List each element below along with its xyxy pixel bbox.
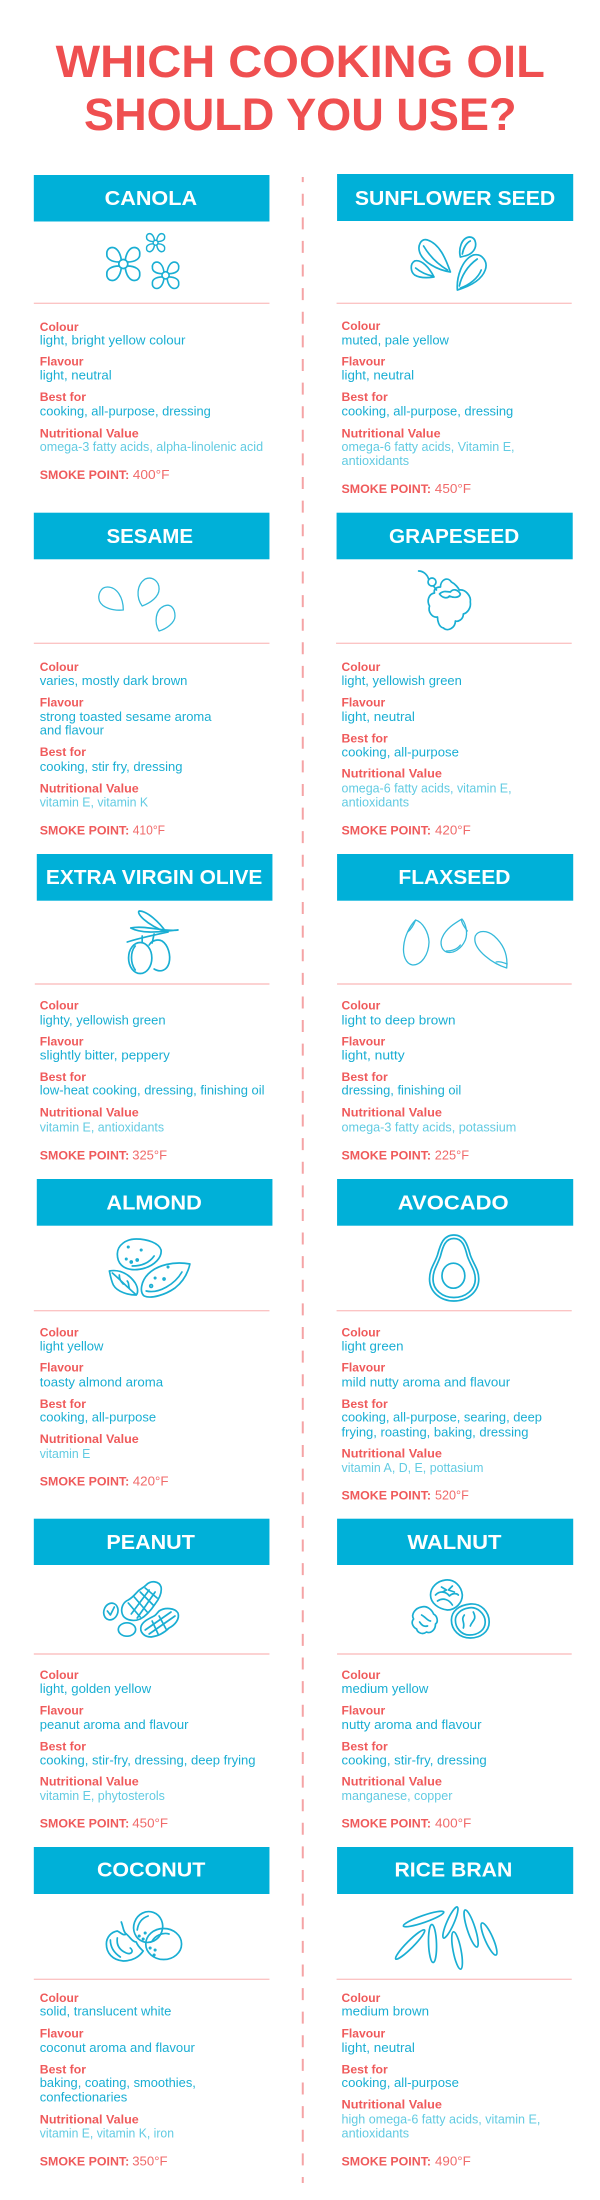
header: walnut bbox=[337, 1519, 573, 1565]
facts: avocado: Flavour bbox=[342, 1361, 386, 1375]
facts: almond: Best for bbox=[40, 1397, 86, 1411]
facts: almond: light yellow bbox=[40, 1339, 104, 1353]
facts: sesame: SMOKE POINT: bbox=[40, 823, 129, 837]
facts: rice bran: antioxidants bbox=[342, 2126, 409, 2140]
facts: sesame: Nutritional Value bbox=[40, 781, 139, 795]
header: coconut: COCONUT bbox=[97, 1859, 206, 1882]
facts: flaxseed: Flavour bbox=[342, 1035, 386, 1049]
facts: flaxseed: Nutritional Value bbox=[342, 1105, 442, 1119]
facts: extra virgin olive: slightly bitter, peppery bbox=[40, 1049, 171, 1063]
facts: avocado: mild nutty aroma and flavour bbox=[342, 1376, 510, 1390]
header: extra virgin olive bbox=[37, 854, 272, 901]
panel: canola bbox=[34, 175, 269, 482]
facts: coconut: Nutritional Value bbox=[40, 2112, 139, 2126]
facts: grapeseed: light, yellowish green bbox=[342, 674, 462, 688]
title bbox=[56, 36, 545, 140]
header: avocado: AVOCADO bbox=[398, 1191, 509, 1214]
header: sesame: SESAME bbox=[106, 525, 193, 548]
facts: sesame: strong toasted sesame aroma bbox=[40, 710, 212, 724]
facts: extra virgin olive: lighty, yellowish green bbox=[40, 1014, 166, 1028]
facts: walnut: Nutritional Value bbox=[342, 1775, 442, 1789]
icon: sesame seeds bbox=[99, 578, 175, 631]
facts: sesame: varies, mostly dark brown bbox=[40, 674, 187, 688]
icon: avocado bbox=[430, 1235, 479, 1301]
icon: canola flowers bbox=[107, 234, 179, 288]
facts: avocado: Best for bbox=[342, 1397, 388, 1411]
facts: walnut: SMOKE POINT: bbox=[342, 1817, 431, 1831]
facts: rice bran: light, neutral bbox=[342, 2041, 415, 2055]
panel: sesame bbox=[34, 513, 269, 837]
facts: sunflower seed: muted, pale yellow bbox=[342, 333, 450, 348]
facts: canola: 400°F bbox=[133, 468, 170, 482]
facts: rice bran: 490°F bbox=[435, 2154, 471, 2168]
facts: rice bran: Flavour bbox=[342, 2026, 386, 2040]
facts: coconut: confectionaries bbox=[40, 2091, 127, 2105]
facts: rice bran: Nutritional Value bbox=[342, 2098, 442, 2112]
facts: coconut: SMOKE POINT: bbox=[40, 2154, 129, 2168]
facts: coconut: coconut aroma and flavour bbox=[40, 2041, 195, 2055]
facts: peanut: SMOKE POINT: bbox=[40, 1817, 129, 1831]
header: coconut bbox=[34, 1847, 269, 1894]
facts: almond: 420°F bbox=[133, 1474, 169, 1488]
header: sesame bbox=[34, 513, 269, 559]
facts: almond: SMOKE POINT: bbox=[40, 1474, 129, 1488]
facts: extra virgin olive bbox=[40, 999, 264, 1162]
facts: canola: Colour bbox=[40, 320, 79, 334]
facts: flaxseed: SMOKE POINT: bbox=[342, 1148, 431, 1162]
facts: peanut: cooking, stir-fry, dressing, deep frying bbox=[40, 1753, 256, 1767]
facts: grapeseed: Nutritional Value bbox=[342, 767, 442, 781]
facts: extra virgin olive: Colour bbox=[40, 999, 79, 1013]
facts: avocado: Nutritional Value bbox=[342, 1447, 442, 1461]
facts: avocado: Colour bbox=[342, 1326, 381, 1340]
facts: canola: Best for bbox=[40, 390, 86, 404]
facts: walnut: medium yellow bbox=[342, 1682, 429, 1696]
icon: rice grains bbox=[393, 1906, 500, 1970]
facts: walnut bbox=[342, 1668, 487, 1831]
facts: sunflower seed: cooking, all-purpose, dressing bbox=[342, 405, 513, 419]
facts: grapeseed: omega-6 fatty acids, vitamin E, bbox=[342, 782, 512, 796]
facts: walnut: Best for bbox=[342, 1739, 388, 1753]
header: sunflower seed bbox=[337, 174, 573, 221]
header: peanut: PEANUT bbox=[106, 1531, 195, 1554]
facts: almond: toasty almond aroma bbox=[40, 1376, 163, 1390]
panel: sunflower seed bbox=[337, 174, 573, 496]
facts: extra virgin olive: Nutritional Value bbox=[40, 1105, 139, 1119]
facts: canola: Flavour bbox=[40, 355, 84, 369]
facts: canola: SMOKE POINT: bbox=[40, 468, 129, 482]
facts: flaxseed: 225°F bbox=[435, 1148, 470, 1162]
facts: canola: omega-3 fatty acids, alpha-linolenic acid bbox=[40, 440, 263, 454]
header: extra virgin olive: EXTRA VIRGIN OLIVE bbox=[46, 866, 262, 889]
facts: peanut: Colour bbox=[40, 1668, 79, 1682]
facts: sunflower seed: antioxidants bbox=[342, 454, 409, 468]
panel: extra virgin olive bbox=[35, 854, 272, 1162]
facts: walnut: cooking, stir-fry, dressing bbox=[342, 1753, 487, 1767]
facts: extra virgin olive: Flavour bbox=[40, 1035, 84, 1049]
facts: extra virgin olive: Best for bbox=[40, 1070, 86, 1084]
facts: walnut: 400°F bbox=[435, 1817, 472, 1831]
facts: sesame bbox=[40, 660, 212, 837]
header: almond bbox=[37, 1179, 272, 1226]
title: SHOULD YOU USE? bbox=[84, 89, 517, 140]
icon: walnuts bbox=[412, 1580, 489, 1638]
facts: avocado: light green bbox=[342, 1339, 404, 1353]
facts: sunflower seed: 450°F bbox=[435, 482, 472, 496]
title: WHICH COOKING OIL bbox=[56, 36, 545, 87]
facts: rice bran: medium brown bbox=[342, 2005, 429, 2019]
header: sunflower seed: SUNFLOWER SEED bbox=[355, 187, 555, 210]
facts: rice bran: cooking, all-purpose bbox=[342, 2076, 459, 2090]
facts: peanut: vitamin E, phytosterols bbox=[40, 1789, 165, 1803]
facts: flaxseed: dressing, finishing oil bbox=[342, 1084, 461, 1098]
facts: coconut: Flavour bbox=[40, 2026, 84, 2040]
facts: rice bran: Colour bbox=[342, 1991, 381, 2005]
facts: peanut: Best for bbox=[40, 1739, 86, 1753]
facts: walnut: nutty aroma and flavour bbox=[342, 1718, 482, 1732]
facts: peanut: Nutritional Value bbox=[40, 1775, 139, 1789]
facts: flaxseed bbox=[342, 999, 516, 1162]
facts: rice bran bbox=[342, 1991, 540, 2168]
panel: grapeseed bbox=[336, 513, 573, 837]
facts: grapeseed: cooking, all-purpose bbox=[342, 745, 459, 759]
facts: canola: cooking, all-purpose, dressing bbox=[40, 405, 211, 419]
header: almond: ALMOND bbox=[106, 1191, 202, 1214]
facts: peanut: peanut aroma and flavour bbox=[40, 1718, 189, 1732]
header: rice bran bbox=[337, 1847, 573, 1894]
header: flaxseed: FLAXSEED bbox=[398, 866, 510, 889]
facts: flaxseed: omega-3 fatty acids, potassium bbox=[342, 1120, 516, 1134]
facts: sunflower seed: SMOKE POINT: bbox=[342, 482, 431, 496]
facts: sunflower seed: Best for bbox=[342, 390, 388, 404]
facts: almond: cooking, all-purpose bbox=[40, 1411, 156, 1425]
facts: canola bbox=[40, 320, 263, 482]
facts: extra virgin olive: 325°F bbox=[132, 1148, 167, 1162]
facts: sesame: 410°F bbox=[133, 823, 165, 837]
facts: sunflower seed: Colour bbox=[342, 319, 381, 333]
facts: walnut: manganese, copper bbox=[342, 1789, 452, 1803]
facts: sunflower seed: Nutritional Value bbox=[342, 426, 441, 440]
header: grapeseed: GRAPESEED bbox=[389, 525, 519, 548]
header: canola: CANOLA bbox=[105, 187, 197, 210]
panel: walnut bbox=[337, 1519, 573, 1831]
facts: flaxseed: Best for bbox=[342, 1070, 388, 1084]
icon: almonds bbox=[109, 1239, 190, 1297]
facts: grapeseed bbox=[342, 660, 512, 837]
facts: extra virgin olive: low-heat cooking, dressing, finishing oil bbox=[40, 1084, 264, 1098]
facts: almond bbox=[40, 1326, 169, 1488]
facts: flaxseed: light, nutty bbox=[342, 1049, 406, 1063]
icon: peanuts bbox=[101, 1582, 178, 1637]
facts: sesame: Best for bbox=[40, 745, 86, 759]
facts: canola: Nutritional Value bbox=[40, 426, 139, 440]
facts: grapeseed: antioxidants bbox=[342, 795, 409, 809]
facts: coconut: vitamin E, vitamin K, iron bbox=[40, 2126, 174, 2140]
facts: sunflower seed: Flavour bbox=[342, 355, 386, 369]
header: peanut bbox=[34, 1519, 269, 1565]
panel: peanut bbox=[34, 1519, 269, 1831]
facts: almond: Colour bbox=[40, 1326, 79, 1340]
facts: grapeseed: light, neutral bbox=[342, 710, 415, 724]
header: flaxseed bbox=[337, 854, 573, 901]
facts: canola: light, bright yellow colour bbox=[40, 333, 185, 348]
facts: sesame: and flavour bbox=[40, 724, 104, 738]
header: avocado bbox=[337, 1179, 573, 1226]
facts: peanut: light, golden yellow bbox=[40, 1682, 152, 1696]
facts: rice bran: SMOKE POINT: bbox=[342, 2154, 431, 2168]
facts: grapeseed: SMOKE POINT: bbox=[342, 823, 431, 837]
facts: avocado: 520°F bbox=[435, 1489, 469, 1503]
facts: coconut: 350°F bbox=[132, 2154, 168, 2168]
facts: grapeseed: Best for bbox=[342, 731, 388, 745]
facts: grapeseed: 420°F bbox=[435, 823, 471, 837]
facts: sunflower seed: omega-6 fatty acids, Vitamin E, bbox=[342, 440, 515, 454]
facts: peanut: Flavour bbox=[40, 1703, 84, 1717]
facts: walnut: Flavour bbox=[342, 1703, 386, 1717]
facts: almond: Flavour bbox=[40, 1361, 84, 1375]
panel: almond bbox=[34, 1179, 272, 1488]
facts: rice bran: high omega-6 fatty acids, vitamin E, bbox=[342, 2113, 540, 2127]
icon: coconuts bbox=[106, 1907, 182, 1961]
header: canola bbox=[34, 175, 269, 222]
facts: extra virgin olive: SMOKE POINT: bbox=[40, 1148, 129, 1162]
facts: peanut: 450°F bbox=[132, 1817, 168, 1831]
facts: grapeseed: Flavour bbox=[342, 695, 386, 709]
facts: coconut: baking, coating, smoothies, bbox=[40, 2076, 196, 2090]
facts: sesame: Flavour bbox=[40, 695, 84, 709]
facts: grapeseed: Colour bbox=[342, 660, 381, 674]
facts: canola: light, neutral bbox=[40, 369, 112, 383]
facts: avocado: frying, roasting, baking, dressing bbox=[342, 1425, 529, 1439]
header: grapeseed bbox=[337, 513, 573, 559]
facts: avocado: vitamin A, D, E, pottasium bbox=[342, 1461, 483, 1475]
panel: flaxseed bbox=[337, 854, 573, 1162]
facts: avocado: SMOKE POINT: bbox=[342, 1489, 431, 1503]
facts: flaxseed: light to deep brown bbox=[342, 1014, 456, 1028]
facts: extra virgin olive: vitamin E, antioxidants bbox=[40, 1120, 164, 1134]
facts: avocado bbox=[342, 1326, 542, 1503]
facts: sunflower seed bbox=[342, 319, 515, 496]
facts: almond: Nutritional Value bbox=[40, 1432, 139, 1446]
header: rice bran: RICE BRAN bbox=[394, 1859, 512, 1882]
facts: avocado: cooking, all-purpose, searing, deep bbox=[342, 1411, 542, 1425]
facts: sesame: Colour bbox=[40, 660, 79, 674]
facts: coconut: Best for bbox=[40, 2062, 86, 2076]
facts: sunflower seed: light, neutral bbox=[342, 369, 414, 383]
panel: rice bran bbox=[337, 1847, 573, 2168]
facts: coconut: solid, translucent white bbox=[40, 2005, 171, 2019]
facts: almond: vitamin E bbox=[40, 1447, 90, 1461]
facts: coconut: Colour bbox=[40, 1991, 79, 2005]
facts: rice bran: Best for bbox=[342, 2062, 388, 2076]
facts: walnut: Colour bbox=[342, 1668, 381, 1682]
facts: peanut bbox=[40, 1668, 256, 1831]
icon: flaxseeds bbox=[403, 919, 507, 968]
icon: olives bbox=[127, 911, 178, 974]
facts: coconut bbox=[40, 1991, 196, 2168]
icon: sunflower seeds bbox=[411, 237, 486, 290]
facts: flaxseed: Colour bbox=[342, 999, 381, 1013]
header: walnut: WALNUT bbox=[407, 1531, 502, 1554]
facts: sesame: vitamin E, vitamin K bbox=[40, 795, 149, 809]
panel: avocado bbox=[337, 1179, 573, 1503]
icon: grapes bbox=[419, 571, 470, 630]
panel: coconut bbox=[34, 1847, 269, 2168]
facts: sesame: cooking, stir fry, dressing bbox=[40, 760, 183, 774]
